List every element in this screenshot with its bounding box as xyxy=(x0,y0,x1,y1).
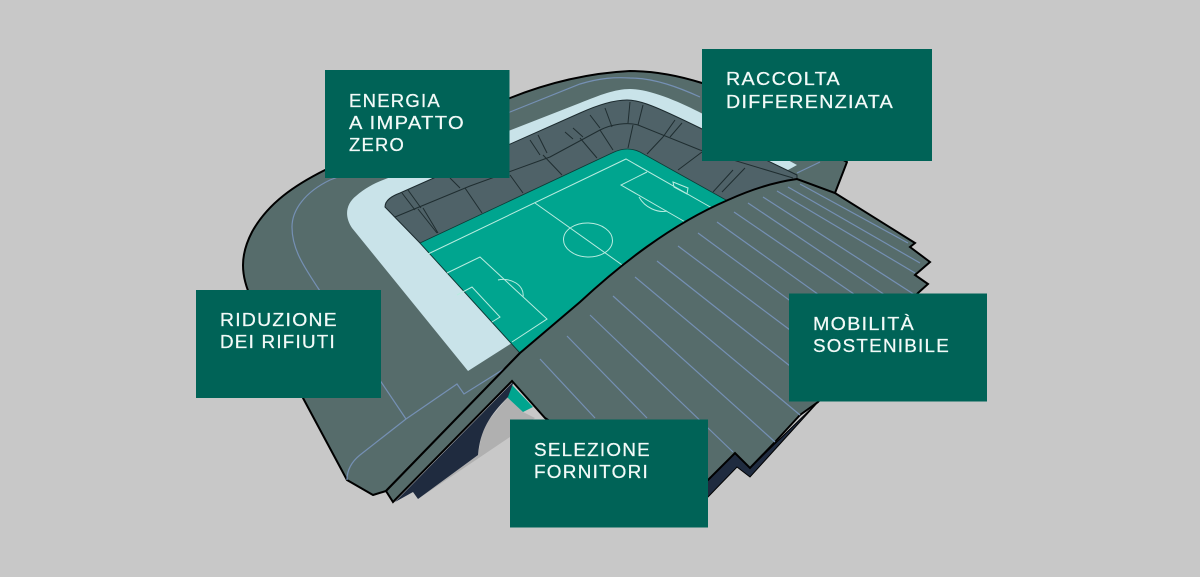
box: energia a impatto zero xyxy=(325,70,510,178)
box: mobilita sostenibile: SOSTENIBILE xyxy=(813,336,950,356)
box: riduzione dei rifiuti xyxy=(196,290,381,398)
back stand body xyxy=(243,71,847,495)
box: mobilita sostenibile: MOBILITÀ xyxy=(813,314,915,334)
box: selezione fornitori: SELEZIONE xyxy=(534,440,651,460)
box: raccolta differenziata: RACCOLTA xyxy=(726,69,841,89)
box: mobilita sostenibile xyxy=(789,294,987,402)
seating row lines xyxy=(395,102,793,233)
blue contour lines on back stand xyxy=(292,78,820,480)
seating bowl xyxy=(385,100,797,353)
light concourse band xyxy=(347,89,797,371)
box: energia a impatto zero: ENERGIA xyxy=(349,91,441,111)
box: selezione fornitori xyxy=(510,420,708,528)
box: selezione fornitori: FORNITORI xyxy=(534,462,649,482)
box: raccolta differenziata xyxy=(702,49,932,161)
roof lower dark edge xyxy=(640,402,818,515)
box: riduzione dei rifiuti: DEI RIFIUTI xyxy=(220,332,336,352)
stadium illustration xyxy=(243,71,930,515)
teal field glimpse under the roof xyxy=(507,385,533,412)
box: raccolta differenziata: DIFFERENZIATA xyxy=(726,92,894,112)
dark underside of the roof arch xyxy=(395,381,514,502)
roof panel lines xyxy=(540,184,920,452)
football pitch xyxy=(420,149,735,353)
box: energia a impatto zero: ZERO xyxy=(349,135,405,155)
pitch markings xyxy=(428,159,712,342)
box: riduzione dei rifiuti: RIDUZIONE xyxy=(220,310,338,330)
box: energia a impatto zero: A IMPATTO xyxy=(349,113,465,133)
roof xyxy=(386,179,930,502)
ground shadow xyxy=(418,397,535,499)
